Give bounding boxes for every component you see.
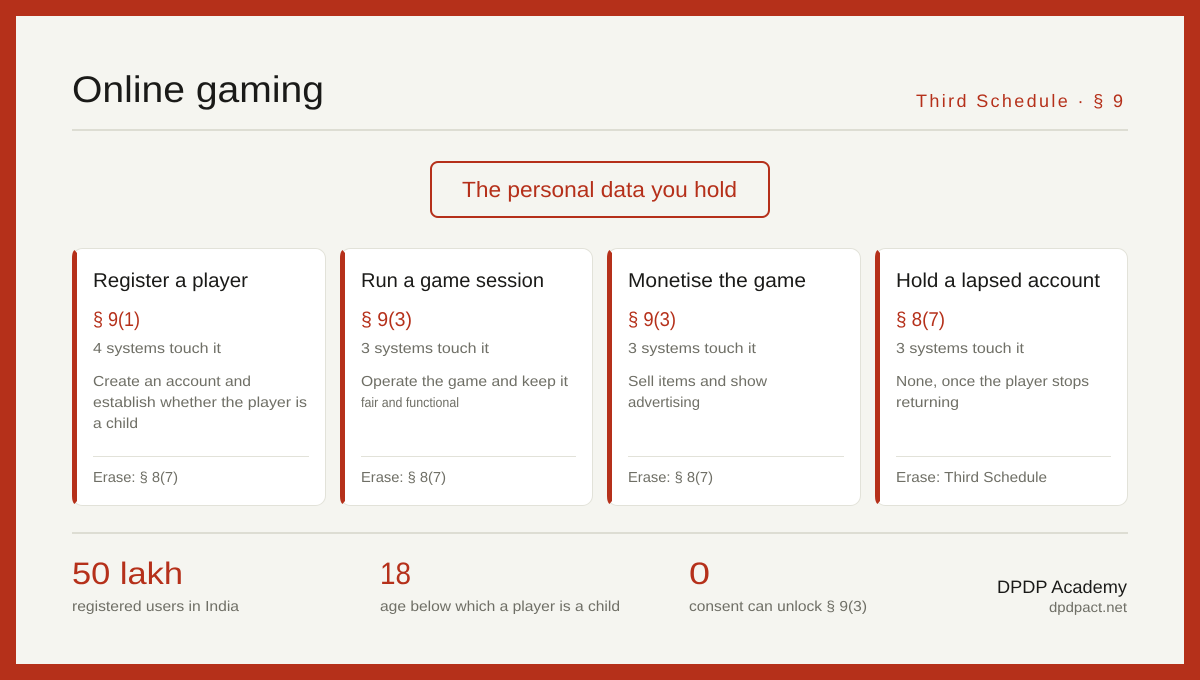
- section reference: § 8(7): [896, 309, 945, 331]
- section reference: § 9(3): [628, 309, 676, 331]
- stat: consent: 0: [689, 556, 710, 591]
- description: fair and functional: [361, 395, 459, 410]
- description: establish whether the player is: [93, 395, 307, 411]
- erase reference: Erase: § 8(7): [628, 470, 713, 486]
- section reference: § 9(3): [361, 309, 412, 331]
- description: [896, 374, 1089, 411]
- erase reference: Erase: Third Schedule: [896, 470, 1047, 486]
- description: advertising: [628, 395, 700, 411]
- erase reference: Erase: § 8(7): [361, 470, 446, 486]
- systems count: 3 systems touch it: [361, 341, 489, 357]
- systems count: 3 systems touch it: [896, 341, 1024, 357]
- card title: Run a game session: [361, 270, 544, 292]
- heading pill: the personal data you hold: The personal data you hold: [462, 177, 737, 202]
- stat: consent: [689, 556, 867, 615]
- card: register a player: [72, 248, 326, 506]
- title: Online gaming: [72, 69, 324, 110]
- heading pill: the personal data you hold: [431, 162, 769, 217]
- card title: Hold a lapsed account: [896, 270, 1100, 292]
- systems count: 3 systems touch it: [628, 341, 756, 357]
- stat: registered users: [72, 556, 240, 615]
- card: run a game session: [340, 248, 592, 506]
- schedule reference: Third Schedule · § 9: [916, 91, 1123, 111]
- description: None, once the player stops: [896, 374, 1089, 390]
- card title: Register a player: [93, 270, 248, 292]
- description: returning: [896, 395, 959, 411]
- card: hold a lapsed account: [875, 248, 1128, 506]
- stat: age threshold: age below which a player is a child: [380, 599, 620, 615]
- description: [628, 374, 768, 411]
- stat: age threshold: 18: [380, 556, 411, 591]
- description: a child: [93, 416, 138, 432]
- systems count: 4 systems touch it: [93, 341, 221, 357]
- branding: dpdpact.net: [1049, 599, 1127, 615]
- description: Operate the game and keep it: [361, 374, 568, 390]
- section reference: § 9(1): [93, 309, 140, 331]
- branding: DPDP Academy: [997, 577, 1127, 597]
- stat: age threshold: [380, 556, 620, 615]
- stat: consent: consent can unlock § 9(3): [689, 599, 867, 615]
- stat: registered users: 50 lakh: [72, 556, 183, 591]
- erase reference: Erase: § 8(7): [93, 470, 178, 486]
- stat: registered users: registered users in India: [72, 599, 240, 615]
- description: Create an account and: [93, 374, 251, 390]
- description: [361, 374, 568, 410]
- card: monetise the game: [607, 248, 860, 506]
- branding: [997, 577, 1127, 615]
- card title: Monetise the game: [628, 270, 806, 292]
- description: [93, 374, 307, 432]
- description: Sell items and show: [628, 374, 768, 390]
